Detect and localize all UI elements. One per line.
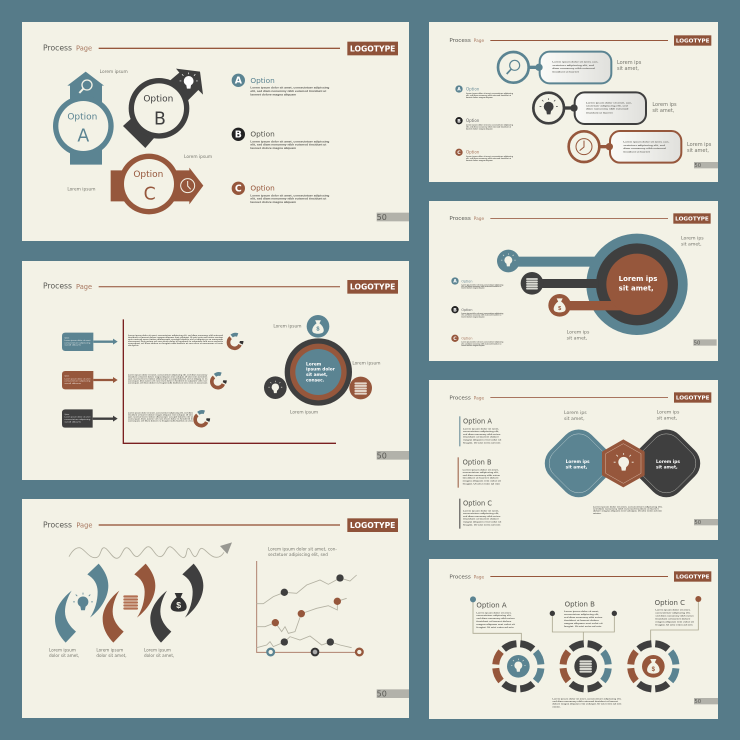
header bbox=[43, 518, 398, 532]
page number: 50 bbox=[694, 163, 702, 169]
option A text: feugiat. Ut wisi enim ad min bbox=[463, 442, 500, 445]
option B text: sed diam nonummy nibh euism bbox=[463, 475, 501, 477]
arrow box dark: Lorem ipsum dolor sit amet bbox=[64, 416, 91, 419]
diamond teal: Lorem ips bbox=[566, 459, 590, 465]
text block 3: quis nostrud exerci tation ullamcorper suscipit lobortis nisl ut bbox=[128, 416, 194, 419]
option B text: magna aliquam erat volut sit bbox=[463, 480, 502, 483]
legend A: A bbox=[457, 87, 461, 93]
header: LOGOTYPE bbox=[350, 44, 395, 53]
pill teal: Lorem ipsum dolor sit amet, con- bbox=[552, 61, 599, 64]
page number: 50 bbox=[377, 690, 387, 699]
header: Process bbox=[43, 43, 72, 52]
cluster labels bbox=[273, 324, 380, 415]
legend A: elit, sed diam nonummy nibh euismod tincidunt ut bbox=[466, 94, 511, 97]
header: Page bbox=[474, 395, 484, 401]
text block 3: Lorem ipsum dolor sit amet, consectetuer adipiscing elit, sed diam bbox=[128, 412, 194, 415]
legend B: B bbox=[453, 307, 457, 313]
legend C: elit, sed diam nonummy nibh euismod tincidunt ut bbox=[466, 157, 511, 160]
caption: Lorem ipsum dolor sit amet, consectetuer adipiscing elit, bbox=[552, 697, 622, 700]
swoosh labels: dolor sit amet, bbox=[96, 653, 127, 658]
icon: money bag bbox=[307, 315, 329, 338]
stem brown with bag: $ bbox=[558, 306, 562, 312]
labels bbox=[567, 236, 704, 342]
callout C: feugiat. Ut wisi enim ad min bbox=[655, 624, 693, 627]
chart caption: Lorem ipsum dolor sit amet, con- bbox=[268, 547, 337, 552]
text block 3 bbox=[128, 412, 194, 423]
shape labels bbox=[67, 69, 212, 192]
callout C: Lorem ipsum dolor sit amet, bbox=[655, 609, 691, 612]
legend B: B bbox=[457, 118, 461, 124]
legend B bbox=[232, 128, 330, 150]
legend B: elit, sed diam nonummy nibh euismod tincidunt ut bbox=[250, 143, 326, 147]
pill teal: Lorem ips bbox=[617, 60, 642, 66]
page number bbox=[377, 213, 409, 222]
legend A: laoreet dolore magna aliquam bbox=[461, 287, 485, 290]
icon: money bag: $ bbox=[176, 600, 181, 610]
pill dark: Lorem ips bbox=[652, 102, 677, 108]
legend C: laoreet dolore magna aliquam bbox=[461, 344, 485, 347]
option C text: sed diam nonummy nibh euism bbox=[463, 516, 501, 518]
swoosh labels: Lorem ipsum bbox=[96, 648, 123, 653]
text block 2: quis nostrud exerci tation ullamcorper suscipit lobortis nisl ut aliquip ex ea bbox=[128, 377, 207, 380]
arrow box teal: consectetuer adipiscing bbox=[64, 341, 90, 344]
ring C with bag bbox=[621, 634, 685, 698]
legend C: Option bbox=[466, 150, 480, 155]
legend A: A bbox=[235, 76, 243, 87]
callout B: consectetuer adipiscing elit, bbox=[564, 613, 600, 616]
legend B: Lorem ipsum dolor sit amet, consectetuer adipiscing bbox=[461, 312, 503, 315]
caption: sed diam nonummy nibh euismod tincidunt ut laoreet bbox=[593, 507, 659, 510]
option A text: Option A bbox=[463, 418, 492, 426]
diamond teal: sit amet, bbox=[566, 465, 588, 471]
caption bbox=[593, 505, 663, 515]
diamond teal bbox=[537, 422, 620, 505]
wavy arrow bbox=[69, 542, 232, 558]
callout C bbox=[651, 596, 701, 641]
shape labels: Lorem ipsum bbox=[100, 69, 128, 75]
legend A: Lorem ipsum dolor sit amet, consectetuer adipiscing bbox=[250, 86, 330, 90]
icon: coins bbox=[123, 595, 138, 610]
option B text bbox=[458, 457, 502, 488]
caption: Lorem ipsum dolor sit amet, consectetuer adipiscing elit, bbox=[593, 505, 663, 508]
ring 3 bbox=[195, 412, 208, 426]
stem brown with bag bbox=[548, 294, 623, 317]
caption bbox=[552, 697, 622, 708]
swoosh labels bbox=[49, 648, 174, 658]
text block 1 bbox=[128, 334, 224, 347]
ring C with bag: $ bbox=[652, 667, 656, 673]
text block 3: consequat. Duis autem vel eum iriure dolor in hendrerit in bbox=[128, 418, 193, 421]
circle cluster bbox=[285, 338, 352, 406]
ring A with bulb bbox=[486, 634, 550, 698]
callout B: Lorem ipsum dolor sit amet, bbox=[564, 610, 600, 613]
pill dark: diam nonummy nibh euismod bbox=[586, 109, 629, 111]
callout B bbox=[550, 601, 617, 641]
page number: 50 bbox=[694, 699, 702, 705]
circle cluster: Lorem bbox=[306, 361, 322, 367]
page number: 50 bbox=[694, 520, 702, 526]
circle cluster: ipsum dolor bbox=[306, 367, 336, 373]
header: Page bbox=[76, 283, 92, 291]
pill brown: tincidunt ut laoreet bbox=[623, 151, 650, 154]
diamond dark bbox=[625, 422, 708, 505]
swoosh labels: Lorem ipsum bbox=[144, 648, 171, 653]
legend B: Lorem ipsum dolor sit amet, consectetuer adipiscing bbox=[466, 123, 513, 126]
callout B: magna aliquam erat volut sit bbox=[564, 622, 603, 625]
diamond dark: sit amet, bbox=[656, 465, 678, 471]
pill teal: sit amet, bbox=[617, 66, 639, 72]
page number: 50 bbox=[377, 451, 387, 460]
page number bbox=[694, 698, 718, 705]
callout A: tincidunt ut laoreet dolore bbox=[476, 620, 511, 623]
caption: dolore magna aliquam erat volutpat. Ut wisi enim ad min bbox=[593, 510, 662, 513]
callout C: consectetuer adipiscing elit, bbox=[655, 612, 691, 615]
legend A: Lorem ipsum dolor sit amet, consectetuer adipiscing bbox=[466, 92, 513, 95]
option C text: consectetuer adipiscing elit, bbox=[463, 512, 500, 515]
swoosh labels: dolor sit amet, bbox=[49, 653, 79, 658]
concentric circle bbox=[586, 234, 688, 335]
swoosh labels: Lorem ipsum bbox=[49, 648, 76, 653]
shape labels: Lorem ipsum bbox=[67, 186, 95, 192]
callout A bbox=[470, 596, 521, 641]
ring B with coins bbox=[554, 634, 618, 698]
option A shape: A bbox=[77, 127, 89, 147]
arrow box brown: consectetuer adipiscing bbox=[64, 380, 90, 383]
pill teal bbox=[498, 52, 642, 83]
line chart bbox=[257, 561, 363, 655]
header bbox=[43, 42, 398, 55]
option B shape bbox=[123, 69, 203, 148]
legend A: A bbox=[453, 279, 457, 285]
page number bbox=[377, 689, 409, 699]
legend C: laoreet dolore magna aliquam bbox=[466, 159, 493, 162]
pill dark bbox=[533, 92, 677, 124]
text block 2: consequat, vel illum dolore eu feugiat nulla facilisis at vero eros et accumsan bbox=[128, 381, 207, 384]
callout A: consectetuer adipiscing elit, bbox=[476, 614, 512, 617]
text block 1: odio dignissim bbox=[128, 345, 139, 347]
header: Process bbox=[449, 216, 471, 222]
option B text: feugiat. Ut wisi enim ad min bbox=[463, 483, 500, 486]
option B text: Lorem ipsum dolor sit amet, bbox=[463, 468, 499, 471]
arrow box brown bbox=[62, 371, 118, 389]
text block 2: Lorem ipsum dolor sit amet, consectetuer adipiscing elit, sed diam nonummy bbox=[128, 373, 207, 376]
text block 3: consequat, vel illum dolore eu feugiat nulla facilisis at vero bbox=[128, 420, 193, 423]
arrow box teal: sed diam bbox=[64, 345, 83, 347]
option C text: Option C bbox=[463, 500, 492, 508]
text block 1: consequat. Duis autem vel eum iriure dolor in hendrerit in vulputate velit esse molestie bbox=[128, 340, 223, 343]
legend C bbox=[455, 149, 513, 162]
text block 1: quis nostrud exerci tation ullamcorper suscipit lobortis nisl ut aliquip ex ea commodo bbox=[128, 338, 223, 341]
legend C: Option bbox=[250, 183, 275, 192]
pill teal: diam nonummy nibh euismod bbox=[552, 68, 596, 70]
panel: callout pills bbox=[429, 22, 718, 182]
labels: Lorem ips bbox=[567, 330, 590, 336]
text block 2 bbox=[128, 373, 208, 384]
legend A bbox=[451, 277, 503, 290]
option C text: feugiat. Ut wisi enim ad min bbox=[463, 524, 500, 527]
legend A: elit, sed diam nonummy nibh euismod tincidunt ut bbox=[461, 285, 502, 288]
swoosh brown bbox=[103, 564, 155, 643]
page number: 50 bbox=[694, 340, 701, 346]
header: LOGOTYPE bbox=[676, 38, 710, 44]
icon: money bag bbox=[171, 593, 187, 612]
legend A: Option bbox=[461, 279, 472, 283]
callout A: sed diam nonummy nibh euism bbox=[476, 618, 515, 620]
legend C: elit, sed diam nonummy nibh euismod tincidunt ut bbox=[461, 342, 502, 345]
labels: sit amet, bbox=[657, 416, 678, 422]
option A text: consectetuer adipiscing elit, bbox=[463, 430, 500, 433]
labels: Lorem ips bbox=[564, 410, 587, 416]
caption: minim. bbox=[552, 706, 561, 708]
header: Process bbox=[449, 38, 471, 44]
legend C: Lorem ipsum dolor sit amet, consectetuer adipiscing bbox=[466, 155, 513, 158]
pill dark: Lorem ipsum dolor sit amet, con- bbox=[586, 101, 632, 104]
legend B: B bbox=[235, 130, 242, 141]
ring 1 bbox=[228, 335, 242, 348]
page number bbox=[694, 519, 718, 526]
page number bbox=[693, 339, 717, 346]
legend A bbox=[232, 74, 330, 96]
arrow box dark: sed diam bbox=[64, 421, 83, 423]
callout B: Option B bbox=[565, 601, 595, 609]
legend C: laoreet dolore magna aliquam bbox=[250, 200, 297, 204]
stem dark with coins bbox=[521, 272, 599, 295]
arrow box brown: Lorem ipsum dolor sit amet bbox=[64, 377, 91, 380]
option A text: magna aliquam erat volut sit bbox=[463, 439, 502, 442]
icon: money bag: $ bbox=[316, 327, 320, 333]
text block 1: consequat, vel illum dolore eu feugiat nulla facilisis at vero eros et accumsan et iusto bbox=[128, 342, 223, 345]
shape labels: Lorem ipsum bbox=[184, 154, 212, 160]
labels: sit amet, bbox=[681, 242, 702, 248]
legend B: laoreet dolore magna aliquam bbox=[250, 146, 297, 150]
pill teal: tincidunt ut laoreet bbox=[552, 71, 579, 74]
pill brown: sit amet, bbox=[687, 148, 709, 154]
legend B: Option bbox=[466, 118, 480, 123]
circle cluster: sit amet, bbox=[306, 372, 328, 378]
pill dark: tincidunt ut laoreet bbox=[586, 111, 613, 114]
legend C: C bbox=[457, 150, 461, 156]
legend B bbox=[455, 117, 513, 130]
option A shape bbox=[53, 72, 114, 165]
header bbox=[449, 571, 711, 582]
legend A: laoreet dolore magna aliquam bbox=[466, 96, 493, 99]
legend A: Lorem ipsum dolor sit amet, consectetuer adipiscing bbox=[461, 283, 503, 286]
option A text: sed diam nonummy nibh euism bbox=[463, 434, 501, 436]
swoosh labels: dolor sit amet, bbox=[144, 653, 174, 658]
labels: sit amet, bbox=[564, 416, 585, 422]
page number bbox=[694, 162, 718, 169]
center circle: Lorem ips bbox=[619, 275, 657, 283]
panel: option A B C badges bbox=[22, 22, 409, 241]
header: LOGOTYPE bbox=[675, 216, 709, 222]
legend A: Option bbox=[466, 87, 480, 92]
option A shape: Option bbox=[67, 112, 97, 122]
pill teal: sectetuer adipiscing elit, sed bbox=[552, 64, 595, 67]
labels: sit amet, bbox=[567, 336, 588, 342]
text block 3: tincidunt ut laoreet dolore magna aliquam erat volutpat. Ut wisi bbox=[128, 414, 194, 417]
labels bbox=[564, 409, 680, 422]
labels: Lorem ips bbox=[657, 409, 680, 415]
option C text: tincidunt ut laoreet dolore bbox=[463, 518, 499, 521]
option C text: magna aliquam erat volut sit bbox=[463, 521, 502, 524]
legend C: Option bbox=[461, 337, 472, 341]
arrow box dark: consectetuer adipiscing bbox=[64, 418, 90, 421]
callout C: magna aliquam erat volut sit bbox=[655, 621, 695, 624]
callout A: feugiat. Ut wisi enim ad min bbox=[476, 626, 514, 629]
header: Process bbox=[449, 574, 471, 580]
header bbox=[449, 35, 711, 46]
callout C: sed diam nonummy nibh euism bbox=[655, 616, 694, 618]
callout B: sed diam nonummy nibh euism bbox=[564, 617, 603, 619]
callout B: feugiat. Ut wisi enim ad min bbox=[564, 625, 601, 628]
caption: dolore magna aliquam erat volutpat. Ut wisi enim ad min bbox=[552, 703, 621, 706]
swoosh dark bbox=[150, 564, 203, 643]
circle cluster: consec. bbox=[306, 378, 325, 383]
panel: segmented rings bbox=[429, 559, 718, 719]
arrow box teal: Option bbox=[64, 336, 69, 339]
option B text: consectetuer adipiscing elit, bbox=[463, 471, 499, 474]
header: LOGOTYPE bbox=[676, 574, 710, 580]
axis bbox=[123, 319, 336, 443]
option C shape bbox=[111, 154, 203, 214]
arrow box dark bbox=[62, 409, 118, 428]
pill dark: sit amet, bbox=[652, 108, 675, 114]
option A text: tincidunt ut laoreet dolore bbox=[463, 436, 499, 439]
header: LOGOTYPE bbox=[350, 283, 395, 292]
panel: arrows, axis and circle cluster bbox=[22, 261, 409, 480]
center circle bbox=[606, 254, 668, 315]
legend C: C bbox=[453, 336, 457, 342]
legend B: elit, sed diam nonummy nibh euismod tincidunt ut bbox=[461, 314, 502, 317]
header: Page bbox=[76, 45, 92, 53]
header: LOGOTYPE bbox=[676, 395, 710, 401]
callout C: tincidunt ut laoreet dolore bbox=[655, 618, 690, 621]
panel: swooshes and line chart bbox=[22, 499, 409, 718]
header: LOGOTYPE bbox=[350, 521, 395, 530]
legend B: Option bbox=[250, 130, 275, 139]
legend C bbox=[232, 182, 330, 204]
legend B: elit, sed diam nonummy nibh euismod tincidunt ut bbox=[466, 125, 511, 128]
pill brown: sectetuer adipiscing elit, sed bbox=[623, 144, 666, 147]
header: Page bbox=[474, 574, 484, 580]
legend A: laoreet dolore magna aliquam bbox=[250, 92, 297, 96]
callout C: Option C bbox=[655, 599, 685, 607]
callout A: Lorem ipsum dolor sit amet, bbox=[476, 611, 512, 614]
pill brown: Lorem ipsum dolor sit amet, con- bbox=[623, 141, 670, 144]
icon: coins bbox=[349, 377, 372, 399]
labels: Lorem ips bbox=[681, 236, 704, 242]
chart caption bbox=[268, 547, 337, 557]
hexagon with bulb bbox=[602, 439, 645, 487]
text block 2: tincidunt ut laoreet dolore magna aliquam erat volutpat. Ut wisi enim ad minim bbox=[128, 375, 208, 378]
page number bbox=[377, 451, 409, 460]
icon: bulb bbox=[73, 593, 93, 610]
option C text: Lorem ipsum dolor sit amet, bbox=[463, 509, 500, 512]
header: Page bbox=[474, 38, 484, 44]
legend B bbox=[451, 306, 503, 318]
pill brown: Lorem ips bbox=[687, 142, 712, 148]
swoosh teal bbox=[55, 564, 108, 643]
callout B: tincidunt ut laoreet dolore bbox=[564, 619, 599, 622]
icon: bulb bbox=[264, 376, 287, 399]
legend B: laoreet dolore magna aliquam bbox=[461, 315, 485, 318]
arrow box teal bbox=[62, 333, 118, 351]
caption: sed diam nonummy nibh euismod tincidunt ut laoreet bbox=[552, 700, 619, 703]
option A text: Lorem ipsum dolor sit amet, bbox=[463, 427, 500, 430]
callout A: magna aliquam erat volut sit bbox=[476, 623, 516, 626]
cluster labels: Lorem ipsum bbox=[352, 361, 380, 367]
panel: concentric circle with stems bbox=[429, 201, 718, 361]
option B shape: B bbox=[154, 109, 166, 129]
legend B: Lorem ipsum dolor sit amet, consectetuer adipiscing bbox=[250, 139, 330, 143]
chart caption: sectetuer adipiscing elit, sed bbox=[268, 552, 328, 557]
stem teal with bulb bbox=[497, 250, 596, 272]
header: Process bbox=[43, 282, 72, 291]
header bbox=[449, 392, 711, 403]
legend C: C bbox=[235, 184, 242, 195]
cluster labels: Lorem ipsum bbox=[273, 324, 301, 330]
header: Page bbox=[474, 216, 484, 222]
option B text: tincidunt ut laoreet dolore bbox=[463, 477, 499, 480]
text block 2: consequat. Duis autem vel eum iriure dolor in hendrerit in vulputate velit esse bbox=[128, 379, 207, 382]
header: Process bbox=[449, 395, 471, 401]
legend B: laoreet dolore magna aliquam bbox=[466, 127, 493, 130]
text block 1: tincidunt ut laoreet dolore magna aliquam erat volutpat. Ut wisi enim ad minim veniam bbox=[128, 336, 224, 339]
header: Process bbox=[43, 520, 72, 529]
ring 2 bbox=[212, 374, 225, 388]
arrow box dark: Option bbox=[64, 413, 69, 416]
caption: minim. bbox=[593, 513, 602, 515]
text block 1: Lorem ipsum dolor sit amet, consectetuer adipiscing elit, sed diam nonummy nibh euismod bbox=[128, 334, 223, 337]
option B shape: Option bbox=[143, 95, 173, 105]
option A text bbox=[459, 416, 502, 446]
option C text bbox=[459, 499, 502, 529]
arrow box teal: Lorem ipsum dolor sit amet bbox=[64, 339, 91, 342]
cluster labels: Lorem ipsum bbox=[290, 409, 318, 415]
legend C: elit, sed diam nonummy nibh euismod tincidunt ut bbox=[250, 197, 326, 201]
arrow box brown: sed diam bbox=[64, 383, 83, 385]
legend A bbox=[455, 85, 513, 99]
header: Page bbox=[76, 522, 92, 530]
pill dark: sectetuer adipiscing elit, sed bbox=[586, 105, 629, 108]
page number: 50 bbox=[377, 213, 387, 222]
legend A: Option bbox=[250, 76, 275, 85]
legend C: Lorem ipsum dolor sit amet, consectetuer adipiscing bbox=[461, 341, 503, 344]
pill brown bbox=[569, 131, 712, 163]
header bbox=[43, 280, 398, 294]
legend A: elit, sed diam nonummy nibh euismod tincidunt ut bbox=[250, 89, 326, 93]
panel: diamonds and hexagon bbox=[429, 380, 718, 540]
pill brown: diam nonummy nibh euismod bbox=[623, 148, 667, 150]
legend C bbox=[451, 335, 503, 347]
arrow box brown: Option bbox=[64, 375, 69, 378]
legend C: Lorem ipsum dolor sit amet, consectetuer adipiscing bbox=[250, 193, 330, 197]
option C shape: Option bbox=[133, 170, 163, 180]
option B text: Option B bbox=[463, 458, 492, 466]
diamond dark: Lorem ips bbox=[656, 459, 680, 465]
callout A: Option A bbox=[476, 602, 507, 610]
header bbox=[449, 213, 711, 224]
legend B: Option bbox=[461, 308, 472, 312]
center circle: sit amet, bbox=[619, 284, 654, 292]
option C shape: C bbox=[144, 184, 156, 204]
